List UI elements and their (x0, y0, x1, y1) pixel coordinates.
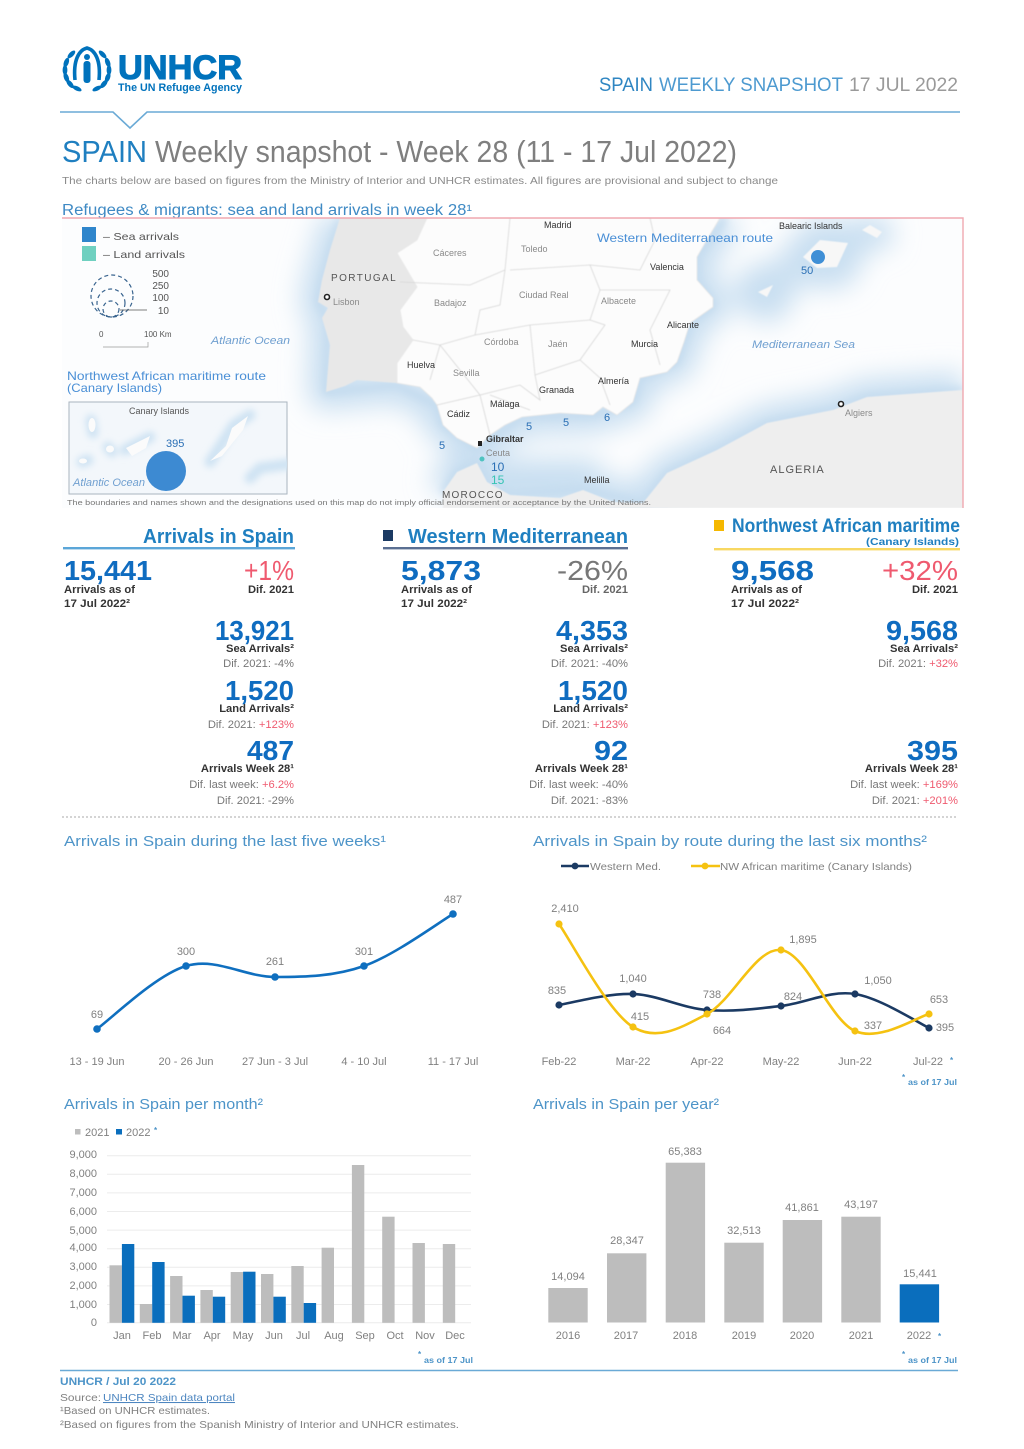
month labels: Oct (386, 1330, 404, 1342)
total arrivals: Arrivals as of (64, 584, 135, 596)
year labels: 2019 (732, 1330, 756, 1342)
sea arrivals: Dif. 2021: +32% (878, 658, 958, 670)
note: as of 17 Jul: * (902, 1350, 906, 1359)
axis labels (69, 1056, 478, 1068)
map legend (82, 227, 185, 347)
map place labels: Algiers (845, 408, 873, 418)
axis labels: Mar-22 (616, 1056, 650, 1068)
land arrivals: 1,520 (558, 675, 628, 706)
chart legend: NW African maritime (Canary Islands) (720, 861, 912, 873)
axis labels (542, 1056, 943, 1068)
map place labels: PORTUGAL (331, 273, 397, 284)
sea arrivals: Dif. 2021: -40% (551, 658, 628, 670)
difference from 2021 (244, 555, 294, 596)
month labels: Dec (445, 1330, 465, 1342)
chart title: Arrivals in Spain per month² (64, 1096, 263, 1113)
month labels: Jul (296, 1330, 310, 1342)
chart legend: Western Med. (590, 861, 661, 873)
Canary route heading (68, 372, 266, 394)
bars 2021 (110, 1165, 455, 1323)
sea arrivals (551, 615, 628, 670)
sea arrivals (215, 615, 294, 670)
year labels: 2017 (614, 1330, 638, 1342)
weekly arrivals: Dif. last week: -40% (529, 779, 628, 791)
data labels: 1,050 (864, 975, 892, 987)
panel: map of arrivals: Atlantic Ocean (210, 335, 290, 347)
sea arrivals (878, 615, 958, 670)
title: SPAIN (62, 134, 147, 169)
inset: Canary Islands: Canary Islands (129, 406, 190, 416)
note: as of 17 Jul: * (938, 1332, 942, 1341)
data labels: 664 (713, 1025, 731, 1037)
map place labels: Córdoba (484, 337, 519, 347)
sea arrivals: 4,353 (556, 615, 628, 646)
footer source: Source: (60, 1392, 101, 1404)
title: Weekly snapshot - Week 28 (11 - 17 Jul 2022) (155, 134, 737, 169)
route labels: Western Mediterranean route (597, 231, 773, 245)
note: as of 17 Jul (902, 1056, 957, 1087)
map place labels: Melilla (584, 475, 610, 485)
footer date: UNHCR / Jul 20 2022 (60, 1376, 176, 1388)
year labels: 2016 (556, 1330, 580, 1342)
chart: arrivals by route (533, 833, 957, 1087)
arrival bubbles and counts: 5 (439, 440, 445, 452)
heading: Western Mediterranean: Western Mediterranean (408, 526, 628, 548)
arrival bubbles and counts: 15 (491, 473, 505, 487)
weekly arrivals: Dif. 2021: -29% (217, 795, 294, 807)
footnote 1: ¹Based on UNHCR estimates. (60, 1405, 210, 1417)
weekly arrivals: Dif. last week: +169% (850, 779, 958, 791)
heading: Northwest African maritime: Northwest African maritime (732, 516, 960, 537)
bar values: 28,347 (610, 1235, 644, 1247)
footnote 2: ²Based on figures from the Spanish Ministry of Interior and UNHCR estimates. (60, 1419, 459, 1431)
difference from 2021: Dif. 2021 (248, 584, 294, 596)
data labels (91, 894, 462, 1021)
chart legend (561, 861, 912, 873)
y axis labels: 6,000 (69, 1206, 97, 1218)
inset: Canary Islands: Atlantic Ocean (72, 477, 145, 489)
data labels: 69 (91, 1009, 103, 1021)
panel: Northwest African maritime (714, 516, 960, 807)
header snapshot label: WEEKLY SNAPSHOT (659, 75, 843, 96)
land arrivals: Land Arrivals² (219, 703, 294, 715)
total arrivals: 17 Jul 2022² (64, 598, 130, 610)
chart legend: 2021 (85, 1127, 109, 1139)
y axis labels: 7,000 (69, 1187, 97, 1199)
bar values: 14,094 (551, 1271, 585, 1283)
chart: arrivals in the last five weeks (64, 833, 478, 1068)
header snapshot label (599, 75, 958, 96)
axis labels: 27 Jun - 3 Jul (242, 1056, 308, 1068)
arrival bubbles and counts: 10 (491, 460, 505, 474)
month labels: Feb (143, 1330, 161, 1342)
subtitle: The charts below are based on figures from the Ministry of Interior and UNHCR estimates. All figures are provisional and subject to change (62, 175, 778, 187)
icon: UNHCR wreath and sheltering hands (62, 48, 112, 93)
note: as of 17 Jul: * (950, 1056, 954, 1065)
bar values: 41,861 (785, 1202, 819, 1214)
month labels: Nov (415, 1330, 435, 1342)
y axis labels: 3,000 (69, 1261, 97, 1273)
total arrivals (731, 555, 814, 610)
map legend: 500 (152, 269, 169, 280)
logo tagline: The UN Refugee Agency (118, 82, 243, 94)
land arrivals (208, 675, 294, 731)
logo wordmark: UNHCR (118, 49, 242, 87)
sea arrivals: Sea Arrivals² (226, 643, 294, 655)
chart legend: 2022 (126, 1127, 150, 1139)
inset: Canary Islands: 395 (166, 438, 184, 450)
weekly arrivals: 395 (907, 735, 958, 766)
data labels: 1,040 (619, 973, 647, 985)
weekly arrivals: Arrivals Week 28¹ (865, 763, 958, 775)
map place labels: Madrid (544, 220, 572, 230)
series: Western Med (555, 990, 933, 1032)
bar values: 65,383 (668, 1146, 702, 1158)
map place labels: MOROCCO (442, 490, 504, 501)
map place labels: Gibraltar (486, 434, 524, 444)
chart legend: * (154, 1126, 158, 1135)
Spain land (397, 218, 720, 448)
month labels: Sep (355, 1330, 375, 1342)
y axis labels: 4,000 (69, 1242, 97, 1254)
sea arrivals: Sea Arrivals² (560, 643, 628, 655)
weekly arrivals: Arrivals Week 28¹ (201, 763, 294, 775)
legend square navy (383, 530, 393, 541)
map place labels: Cáceres (433, 248, 467, 258)
map place labels: Balearic Islands (779, 221, 843, 231)
arrival bubbles and counts (439, 250, 825, 487)
data labels: 835 (548, 985, 566, 997)
map place labels: Valencia (650, 262, 684, 272)
total arrivals (64, 555, 152, 610)
total arrivals (401, 555, 481, 610)
axis labels: 11 - 17 Jul (428, 1056, 478, 1068)
month labels: May (233, 1330, 254, 1342)
map place labels: Ciudad Real (519, 290, 569, 300)
map place labels: Albacete (601, 296, 636, 306)
chart title: Arrivals in Spain per year² (533, 1096, 719, 1113)
sea arrivals: 9,568 (886, 615, 958, 646)
difference from 2021: -26% (557, 555, 628, 586)
map place labels: Málaga (490, 399, 520, 409)
sea arrivals: Dif. 2021: -4% (223, 658, 294, 670)
map place labels: Alicante (667, 320, 699, 330)
panel: Arrivals in Spain (63, 526, 295, 807)
sea arrivals: Sea Arrivals² (890, 643, 958, 655)
month labels: Jun (265, 1330, 283, 1342)
month labels (113, 1330, 465, 1342)
note: as of 17 Jul: as of 17 Jul (908, 1356, 957, 1365)
y axis labels: 1,000 (69, 1299, 97, 1311)
bars 2022 (122, 1244, 316, 1323)
land arrivals (542, 675, 628, 731)
year labels (556, 1330, 931, 1342)
difference from 2021: Dif. 2021 (912, 584, 958, 596)
axis labels: 20 - 26 Jun (158, 1056, 214, 1068)
Canary route heading: Northwest African maritime route (67, 369, 266, 383)
year labels: 2021 (849, 1330, 873, 1342)
map place labels: Ceuta (486, 448, 510, 458)
map legend: 100 Km (144, 330, 172, 339)
header snapshot label: 17 JUL 2022 (849, 75, 958, 96)
Portugal land (318, 218, 427, 392)
axis labels: 13 - 19 Jun (69, 1056, 125, 1068)
map place labels: Sevilla (453, 368, 480, 378)
month labels: Apr (203, 1330, 221, 1342)
axis labels: Jul-22 (913, 1056, 943, 1068)
Canary route heading: (Canary Islands) (67, 381, 162, 395)
data labels: 415 (631, 1011, 649, 1023)
data labels: 653 (930, 994, 948, 1006)
map place labels: Almería (598, 376, 629, 386)
difference from 2021: +32% (882, 555, 958, 586)
month labels: Jan (113, 1330, 131, 1342)
total arrivals: Arrivals as of (401, 584, 472, 596)
chart: arrivals per month (64, 1096, 473, 1365)
month labels: Aug (324, 1330, 344, 1342)
y axis labels (69, 1149, 97, 1329)
footer (60, 1376, 459, 1431)
map place labels: Jaén (548, 339, 568, 349)
land arrivals: 1,520 (225, 675, 294, 706)
land arrivals: Dif. 2021: +123% (542, 719, 628, 731)
arrival bubbles and counts: 5 (563, 417, 569, 429)
inset: Canary Islands (69, 402, 290, 494)
axis labels: Jun-22 (838, 1056, 872, 1068)
weekly arrivals (850, 735, 958, 807)
arrival bubbles and counts: 50 (801, 265, 813, 277)
data labels: 301 (355, 946, 373, 958)
note: as of 17 Jul: as of 17 Jul (424, 1356, 473, 1365)
map place labels: Granada (539, 385, 574, 395)
weekly arrivals: Arrivals Week 28¹ (535, 763, 628, 775)
chart title: Arrivals in Spain by route during the last six months² (533, 833, 927, 850)
North Africa land (443, 390, 963, 508)
axis labels: Feb-22 (542, 1056, 576, 1068)
map legend: – Land arrivals (103, 249, 185, 261)
weekly arrivals: 487 (247, 735, 294, 766)
difference from 2021: Dif. 2021 (582, 584, 628, 596)
map place labels: Badajoz (434, 298, 467, 308)
bars by year (548, 1163, 939, 1322)
weekly arrivals: Dif. 2021: +201% (872, 795, 958, 807)
note: as of 17 Jul (418, 1350, 473, 1365)
Balearic islands (758, 225, 882, 297)
year labels: 2022 (907, 1330, 931, 1342)
panel: map of arrivals: Mediterranean Sea (752, 339, 855, 351)
map legend: 0 (99, 330, 104, 339)
bar values: 15,441 (903, 1268, 937, 1280)
chart legend (75, 1126, 158, 1139)
line series (97, 914, 453, 1029)
data labels: 738 (703, 989, 721, 1001)
axis labels: May-22 (763, 1056, 799, 1068)
header rule with chevron (60, 112, 960, 128)
total arrivals: 17 Jul 2022² (401, 598, 467, 610)
y axis labels: 2,000 (69, 1280, 97, 1292)
subheading: (Canary Islands) (866, 536, 959, 548)
legend square yellow (714, 520, 724, 531)
month labels: Mar (173, 1330, 192, 1342)
data labels: 1,895 (789, 934, 817, 946)
panel: map of arrivals (62, 218, 963, 508)
weekly arrivals: Dif. 2021: -83% (551, 795, 628, 807)
weekly arrivals (189, 735, 294, 807)
chart title: Arrivals in Spain during the last five weeks¹ (64, 833, 386, 850)
year labels: 2018 (673, 1330, 697, 1342)
axis labels: Apr-22 (690, 1056, 724, 1068)
weekly arrivals: 92 (594, 735, 628, 766)
total arrivals: 15,441 (64, 555, 152, 586)
axis labels: 4 - 10 Jul (341, 1056, 387, 1068)
map legend: 10 (158, 306, 169, 317)
sea arrivals: 13,921 (215, 615, 294, 646)
map heading: Refugees & migrants: sea and land arrivals in week 28¹ (62, 202, 472, 219)
y axis labels: 8,000 (69, 1168, 97, 1180)
map place labels (331, 220, 873, 501)
year labels: 2020 (790, 1330, 814, 1342)
data labels: 395 (936, 1022, 954, 1034)
land arrivals: Land Arrivals² (553, 703, 628, 715)
y axis labels: 9,000 (69, 1149, 97, 1161)
arrival bubbles and counts: 6 (604, 412, 610, 424)
map legend: 100 (152, 293, 169, 304)
bar values: 32,513 (727, 1225, 761, 1237)
y axis labels: 5,000 (69, 1225, 97, 1237)
data labels: 487 (444, 894, 462, 906)
UNHCR logo (62, 48, 243, 94)
map place labels: Toledo (521, 244, 548, 254)
land arrivals: Dif. 2021: +123% (208, 719, 294, 731)
chart: arrivals per year (533, 1096, 957, 1365)
map place labels: Lisbon (333, 297, 360, 307)
map disclaimer: The boundaries and names shown and the designations used on this map do not imply official endorsement or acceptance by the United Nations. (67, 498, 651, 507)
weekly arrivals (529, 735, 628, 807)
map legend: 250 (152, 281, 169, 292)
header snapshot label: SPAIN (599, 75, 653, 96)
data labels: 2,410 (551, 903, 579, 915)
bar values: 43,197 (844, 1199, 878, 1211)
footer source (60, 1392, 235, 1404)
note: as of 17 Jul (902, 1332, 957, 1365)
data labels: 824 (784, 991, 802, 1003)
total arrivals: 17 Jul 2022² (731, 598, 799, 610)
map place labels: Murcia (631, 339, 658, 349)
footer source: UNHCR Spain data portal (103, 1392, 235, 1404)
weekly arrivals: Dif. last week: +6.2% (189, 779, 294, 791)
map legend: – Sea arrivals (103, 231, 179, 243)
difference from 2021 (557, 555, 628, 596)
total arrivals: 9,568 (731, 555, 814, 586)
series: NW African maritime (555, 920, 933, 1035)
total arrivals: Arrivals as of (731, 584, 802, 596)
difference from 2021: +1% (244, 555, 294, 586)
note: as of 17 Jul: * (418, 1350, 422, 1359)
total arrivals: 5,873 (401, 555, 481, 586)
bar values (551, 1146, 937, 1283)
data labels: 300 (177, 946, 195, 958)
data labels (548, 903, 954, 1037)
map place labels: Huelva (407, 360, 435, 370)
map place labels: Cádiz (447, 409, 471, 419)
data labels: 337 (864, 1020, 882, 1032)
map place labels: ALGERIA (770, 464, 825, 476)
data labels: 261 (266, 956, 284, 968)
note: as of 17 Jul: as of 17 Jul (908, 1078, 957, 1087)
panel: Western Mediterranean (383, 526, 628, 807)
arrival bubbles and counts: 5 (526, 421, 532, 433)
note: as of 17 Jul: * (902, 1073, 906, 1082)
heading: Arrivals in Spain: Arrivals in Spain (143, 526, 294, 548)
y axis labels: 0 (91, 1317, 97, 1329)
